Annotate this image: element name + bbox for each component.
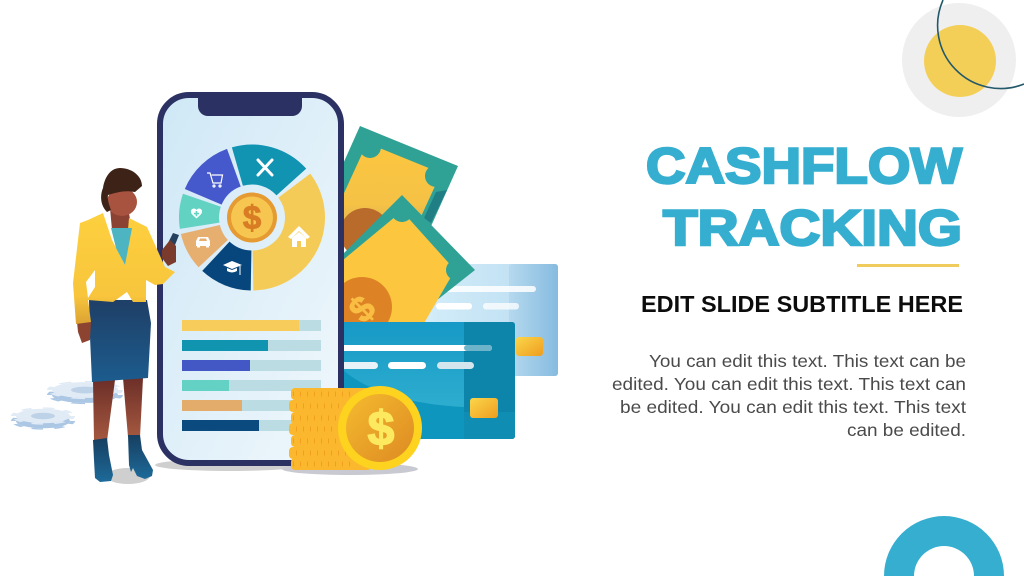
phone notch: [198, 98, 302, 116]
skirt: [89, 300, 151, 382]
coins: [282, 386, 422, 475]
icon: cart: [207, 173, 222, 187]
card chip: [470, 398, 498, 418]
title: [646, 138, 963, 256]
jacket: [73, 213, 175, 324]
front credit card: [330, 322, 515, 439]
body text: can be edited.: [847, 420, 966, 440]
coin on banknote: $: [340, 287, 383, 330]
bar 6: [182, 420, 321, 431]
arm gap: [86, 270, 95, 298]
subtitle: EDIT SLIDE SUBTITLE HERE: [641, 291, 963, 317]
icon: car: [196, 237, 210, 248]
teal top: [111, 228, 132, 265]
icon: graduation cap: [223, 261, 242, 275]
big dollar coin: $: [368, 403, 395, 456]
phone hand: [162, 240, 176, 266]
body text: You can edit this text. This text can be: [649, 351, 966, 371]
coin stack: [289, 388, 371, 470]
body text: edited. You can edit this text. This text can: [612, 374, 966, 394]
bar 5: [182, 400, 321, 411]
shadow: [106, 468, 150, 484]
title: TRACKING: [663, 200, 962, 256]
hair: [101, 168, 142, 212]
banknote: back: [317, 126, 458, 262]
phone body: [160, 95, 341, 463]
decoration: top-right circles: [902, 0, 1024, 117]
icon: heart: [191, 209, 202, 218]
phone shadow: [155, 459, 305, 471]
businesswoman figure: [73, 168, 179, 484]
body text: be edited. You can edit this text. This text: [620, 397, 966, 417]
icon: gears: [14, 381, 120, 429]
bar list: [182, 320, 321, 431]
icon: dollar coin: $: [243, 199, 261, 236]
bar 2: [182, 340, 321, 351]
banknote: front: [327, 195, 475, 337]
title: CASHFLOW: [646, 138, 963, 194]
bar 3: [182, 360, 321, 371]
handheld phone: [168, 233, 179, 245]
donut chart: [177, 143, 327, 292]
icon: dollar coin: [227, 192, 277, 242]
head: [107, 188, 137, 216]
coin on banknote: [332, 277, 392, 337]
decoration: bottom-right ring: [884, 516, 1004, 576]
phone: [160, 95, 341, 463]
bar 4: [182, 380, 321, 391]
icon: house: [288, 226, 310, 247]
left hand: [77, 322, 91, 343]
legs: [93, 378, 143, 441]
boots: [93, 435, 153, 482]
icon: cutlery: [258, 160, 272, 175]
back credit card: [420, 264, 558, 376]
bar 1: [182, 320, 321, 331]
title underline: [857, 264, 959, 267]
body text: [612, 351, 966, 440]
neck: [110, 208, 132, 230]
